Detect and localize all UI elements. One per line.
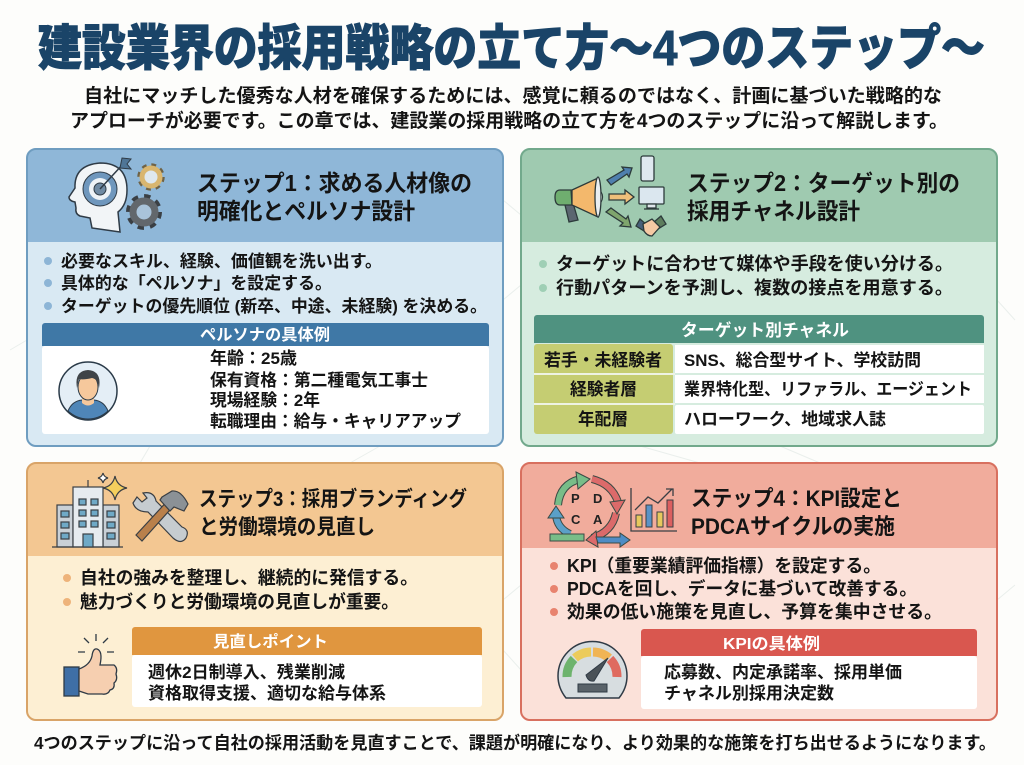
bullet list: step 4: KPI（重要業績評価指標）を設定する。 — [567, 555, 881, 576]
bullet list: step 4: 効果の低い施策を見直し、予算を集中させる。 — [567, 601, 942, 622]
heading: step 4 — [691, 486, 902, 539]
heading: step 2: 採用チャネル設計 — [687, 198, 860, 224]
bullet list: step 2 — [539, 254, 953, 298]
icon: gauge — [558, 642, 627, 698]
bullet list: step 2: 行動パターンを予測し、複数の接点を用意する。 — [556, 278, 953, 298]
icon: crossed wrench and hammer — [133, 491, 188, 542]
review points card: 見直しポイント — [213, 632, 328, 651]
panel: step 1 — [27, 149, 997, 753]
bullet list: step 1: 具体的な「ペルソナ」を設定する。 — [61, 274, 332, 293]
heading: step 1 — [197, 170, 472, 224]
bullet list: step 3: 自社の強みを整理し、継続的に発信する。 — [80, 567, 418, 588]
persona details — [210, 348, 461, 431]
heading: step 4: PDCAサイクルの実施 — [691, 514, 895, 539]
bullet list: step 4 — [550, 555, 942, 622]
icon: head with target and gears — [69, 158, 162, 232]
bullet list: step 3: 魅力づくりと労働環境の見直しが重要。 — [80, 591, 399, 612]
icon: PDCA cycle: C — [571, 512, 581, 527]
KPI examples card: チャネル別採用決定数 — [664, 684, 834, 703]
KPI examples card: 応募数、内定承諾率、採用単価 — [664, 663, 902, 682]
icon: thumbs up — [64, 634, 117, 696]
channel table: SNS、総合型サイト、学校訪問 — [684, 350, 921, 370]
bullet list: step 1: 必要なスキル、経験、価値観を洗い出す。 — [61, 251, 382, 271]
bullet list: step 1 — [44, 251, 487, 316]
heading: step 3 — [199, 487, 467, 539]
heading: step 2: ステップ2：ターゲット別の — [687, 170, 960, 196]
channel table — [534, 315, 984, 434]
persona details: 保有資格：第二種電気工事士 — [210, 370, 428, 390]
panel: step 3 — [27, 463, 503, 720]
channel table: ハローワーク、地域求人誌 — [684, 409, 886, 429]
heading: step 1: ステップ1：求める人材像の — [197, 170, 472, 196]
icon: office building with sparkle — [52, 473, 127, 547]
icon: person avatar — [59, 362, 117, 420]
persona details: 転職理由：給与・キャリアアップ — [210, 411, 461, 431]
intro text — [70, 84, 948, 132]
bullet list: step 4: PDCAを回し、データに基づいて改善する。 — [567, 578, 917, 599]
heading: step 3: ステップ3：採用ブランディング — [199, 487, 467, 511]
persona details: 年齢：25歳 — [210, 348, 297, 368]
footer text: 4つのステップに沿って自社の採用活動を見直すことで、課題が明確になり、より効果的な施策を打ち出せるようになります。 — [34, 733, 996, 753]
channel table: 年配層 — [578, 409, 628, 429]
KPI examples card: KPIの具体例 — [723, 635, 820, 653]
channel table: ターゲット別チャネル — [681, 321, 849, 340]
icon: megaphone to channels — [555, 156, 666, 236]
intro text: 自社にマッチした優秀な人材を確保するためには、感覚に頼るのではなく、計画に基づいた戦略的な — [84, 84, 942, 107]
review points card: 資格取得支援、適切な給与体系 — [148, 683, 386, 703]
icon: PDCA cycle — [548, 472, 630, 547]
persona card: ペルソナの具体例 — [200, 326, 330, 344]
channel table: 経験者層 — [570, 380, 637, 399]
heading: step 2 — [687, 170, 960, 224]
heading: step 1: 明確化とペルソナ設計 — [197, 198, 415, 224]
review points card — [132, 627, 482, 707]
panel: step 4 — [521, 463, 997, 720]
bullet list: step 2: ターゲットに合わせて媒体や手段を使い分ける。 — [556, 254, 953, 274]
panel: step 2 — [521, 149, 997, 446]
bullet list: step 3 — [63, 567, 418, 612]
channel table: 業界特化型、リファラル、エージェント — [684, 380, 972, 399]
bullet list: step 1: ターゲットの優先順位 (新卒、中途、未経験) を決める。 — [61, 297, 487, 316]
icon: PDCA cycle: A — [593, 512, 603, 527]
review points card: 週休2日制導入、残業削減 — [148, 662, 345, 682]
persona details: 現場経験：2年 — [210, 390, 320, 410]
icon: bar chart — [631, 488, 677, 531]
KPI examples card — [641, 629, 977, 709]
heading: step 4: ステップ4：KPI設定と — [691, 486, 902, 511]
persona card — [42, 323, 489, 434]
channel table: 若手・未経験者 — [544, 350, 662, 370]
icon: PDCA cycle: P — [571, 491, 580, 506]
intro text: アプローチが必要です。この章では、建設業の採用戦略の立て方を4つのステップに沿って解説します。 — [70, 109, 948, 132]
heading: step 3: と労働環境の見直し — [199, 516, 375, 539]
icon: PDCA cycle: D — [593, 491, 602, 506]
